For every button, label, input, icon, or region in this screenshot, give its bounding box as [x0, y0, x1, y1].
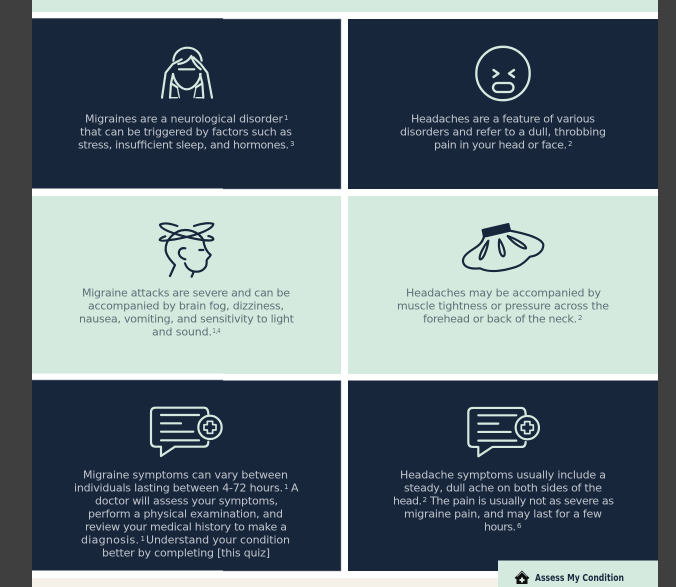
panel: migraine symptoms — [32, 380, 341, 571]
text: migraine attacks: 1,4 — [212, 327, 221, 335]
text: migraine symptoms: perform a physical examination, and — [88, 508, 283, 521]
panel: migraine attacks — [32, 196, 341, 374]
text: migraine definition: 1 — [284, 114, 288, 122]
text: migraine attacks — [79, 287, 295, 339]
panel: migraine definition — [32, 18, 341, 189]
text: migraine symptoms: better by completing [this quiz] — [102, 547, 270, 560]
icon: house with plus — [514, 570, 530, 584]
text: migraine definition: that can be triggered by factors such as — [80, 126, 292, 139]
top green band — [32, 0, 658, 12]
text: headache symptoms: The pain is usually not as severe as — [429, 495, 614, 508]
text: headache definition — [400, 113, 606, 152]
text: migraine symptoms: Understand your condition — [146, 534, 290, 547]
text: migraine definition — [78, 113, 294, 152]
text: headache accompanying symptoms — [397, 287, 609, 326]
panel: headache accompanying symptoms — [348, 196, 658, 374]
text: headache accompanying symptoms: Headaches may be accompanied by — [406, 287, 601, 300]
text: headache accompanying symptoms: muscle tightness or pressure across the — [397, 300, 609, 313]
text: headache symptoms: 2 — [422, 496, 427, 504]
text: migraine definition: Migraines are a neurological disorder — [85, 113, 283, 126]
text: headache symptoms — [393, 469, 614, 534]
text: headache definition: pain in your head or face. — [434, 139, 567, 152]
text: migraine symptoms: individuals lasting between 4-72 hours. — [74, 482, 283, 495]
text: migraine symptoms: 1 — [140, 535, 145, 543]
button: assess my condition — [498, 560, 658, 587]
text: headache definition: disorders and refer to a dull, throbbing — [400, 126, 606, 139]
text: migraine symptoms: Migraine symptoms can vary between — [83, 469, 288, 482]
text: headache symptoms: head. — [393, 495, 422, 508]
text: migraine attacks: accompanied by brain fog, dizziness, — [88, 300, 284, 313]
text: headache symptoms: steady, dull ache on both sides of the — [404, 482, 602, 495]
text: headache symptoms: hours. — [484, 521, 516, 534]
text: migraine definition: 3 — [290, 140, 294, 148]
text: migraine definition: stress, insufficient sleep, and hormones. — [78, 139, 289, 152]
text: migraine symptoms — [74, 469, 299, 560]
text: migraine attacks: nausea, vomiting, and sensitivity to light — [79, 313, 295, 326]
panel: headache definition — [348, 19, 658, 189]
text: headache symptoms: Headache symptoms usually include a — [400, 469, 606, 482]
text: headache accompanying symptoms: forehead or back of the neck. — [423, 313, 577, 326]
icon: pained face — [476, 47, 530, 100]
text: headache definition: 2 — [568, 140, 572, 148]
icon: medical chat bubble — [468, 408, 539, 456]
text: migraine symptoms: 1 — [284, 483, 288, 491]
icon: medical chat bubble — [151, 408, 222, 456]
text: migraine attacks: and sound. — [152, 326, 212, 339]
text: headache definition: Headaches are a feature of various — [411, 113, 595, 126]
text: headache accompanying symptoms: 2 — [578, 314, 582, 322]
icon: dizzy head — [160, 223, 213, 277]
bottom cream band — [32, 578, 658, 587]
text: headache symptoms: 6 — [517, 522, 522, 530]
text: migraine symptoms: diagnosis. — [81, 534, 139, 547]
text: headache symptoms: migraine pain, and may last for a few — [404, 508, 602, 521]
text: migraine symptoms: doctor will assess your symptoms, — [95, 495, 278, 508]
button label: Assess My Condition — [535, 573, 624, 584]
icon: woman holding head — [162, 48, 212, 98]
icon: ice bag — [463, 224, 543, 271]
text: migraine attacks: Migraine attacks are severe and can be — [82, 287, 290, 300]
panel: headache symptoms — [348, 380, 658, 571]
text: migraine symptoms: A — [291, 482, 299, 495]
text: migraine symptoms: review your medical history to make a — [85, 521, 287, 534]
